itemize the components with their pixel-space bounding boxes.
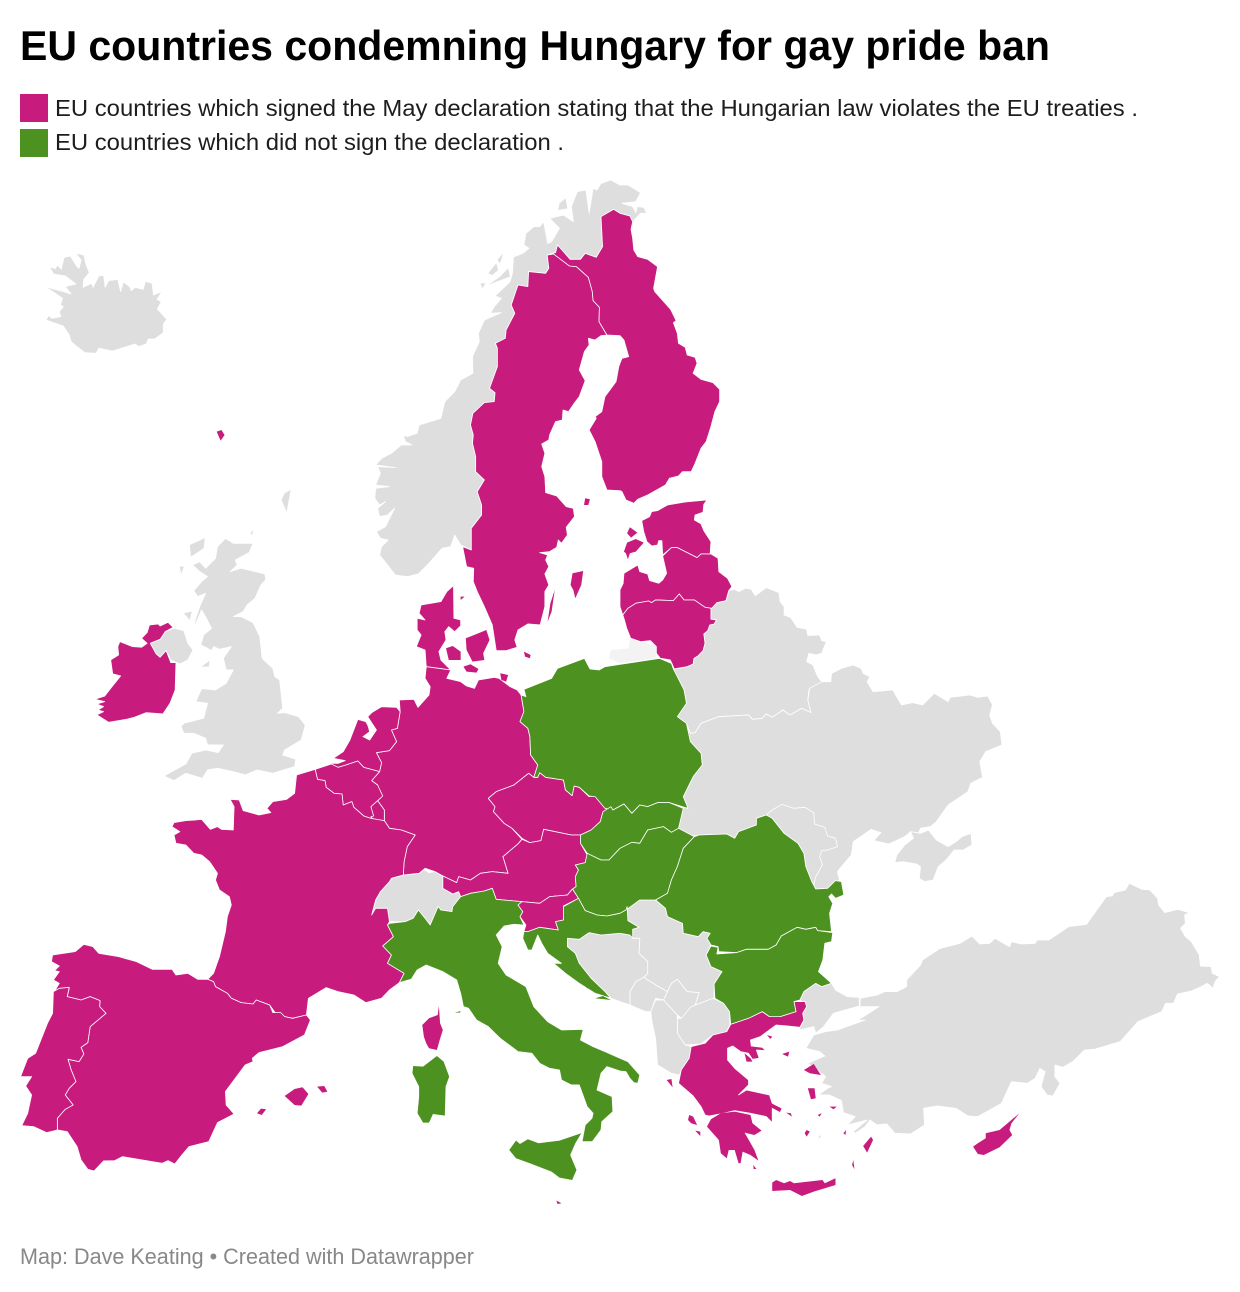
Cyprus: [973, 1113, 1019, 1155]
Lithuania: [623, 594, 716, 669]
Germany: [372, 667, 538, 883]
Sardinia: [412, 1056, 449, 1123]
Bosnia and Herzegovina: [567, 933, 648, 1005]
Czechia: [488, 773, 611, 843]
Kosovo: [663, 979, 699, 1018]
Moldova: [766, 804, 837, 885]
Switzerland: [372, 868, 461, 925]
Greece: [667, 1002, 873, 1196]
Croatia: [523, 898, 639, 1000]
Netherlands: [331, 707, 400, 772]
Spain: [51, 944, 327, 1171]
legend text: did not sign: EU countries which did not sign the declaration .: [55, 129, 564, 155]
United Kingdom: [150, 490, 305, 781]
Estonia: [624, 500, 711, 559]
Crimea: [895, 830, 972, 882]
Ukraine: [679, 665, 1002, 889]
legend swatch: signed: [20, 94, 48, 122]
Bulgaria: [706, 927, 833, 1024]
Hungary: [573, 827, 694, 916]
Poland: [520, 658, 702, 813]
Romania: [656, 815, 844, 953]
Luxembourg: [371, 801, 384, 821]
Denmark: [416, 586, 531, 673]
North Macedonia: [677, 998, 730, 1045]
Italy: [383, 888, 640, 1142]
Faroe Islands: [217, 430, 225, 441]
Slovakia: [580, 803, 683, 860]
Serbia: [627, 900, 722, 1005]
map of Europe: [21, 180, 1219, 1204]
source credit: Map: Dave Keating • Created with Datawrapper: [20, 1244, 474, 1269]
legend: [20, 94, 1138, 157]
Iceland: [45, 253, 167, 353]
Slovenia: [518, 889, 578, 932]
Norway: [375, 180, 647, 577]
Austria: [443, 829, 587, 903]
Latvia: [620, 548, 732, 615]
France: [172, 769, 415, 1018]
Belgium: [315, 761, 383, 818]
legend swatch: did not sign: [20, 129, 48, 157]
Montenegro: [630, 977, 667, 1012]
Sicily: [509, 1133, 581, 1180]
Ireland: [95, 622, 176, 722]
Belarus: [673, 588, 826, 733]
Malta: [556, 1201, 561, 1204]
Albania: [651, 1000, 691, 1075]
Kaliningrad: [609, 638, 656, 663]
Corsica: [422, 1006, 443, 1050]
Turkey: [800, 883, 1219, 1134]
Elba: [455, 1011, 461, 1013]
Portugal: [21, 987, 106, 1133]
legend text: signed: EU countries which signed the May declaration stating that the Hungarian law violates the EU treaties .: [55, 95, 1138, 121]
Finland: [547, 209, 720, 505]
title: EU countries condemning Hungary for gay pride ban: [20, 22, 1050, 69]
Sweden: [463, 254, 607, 651]
